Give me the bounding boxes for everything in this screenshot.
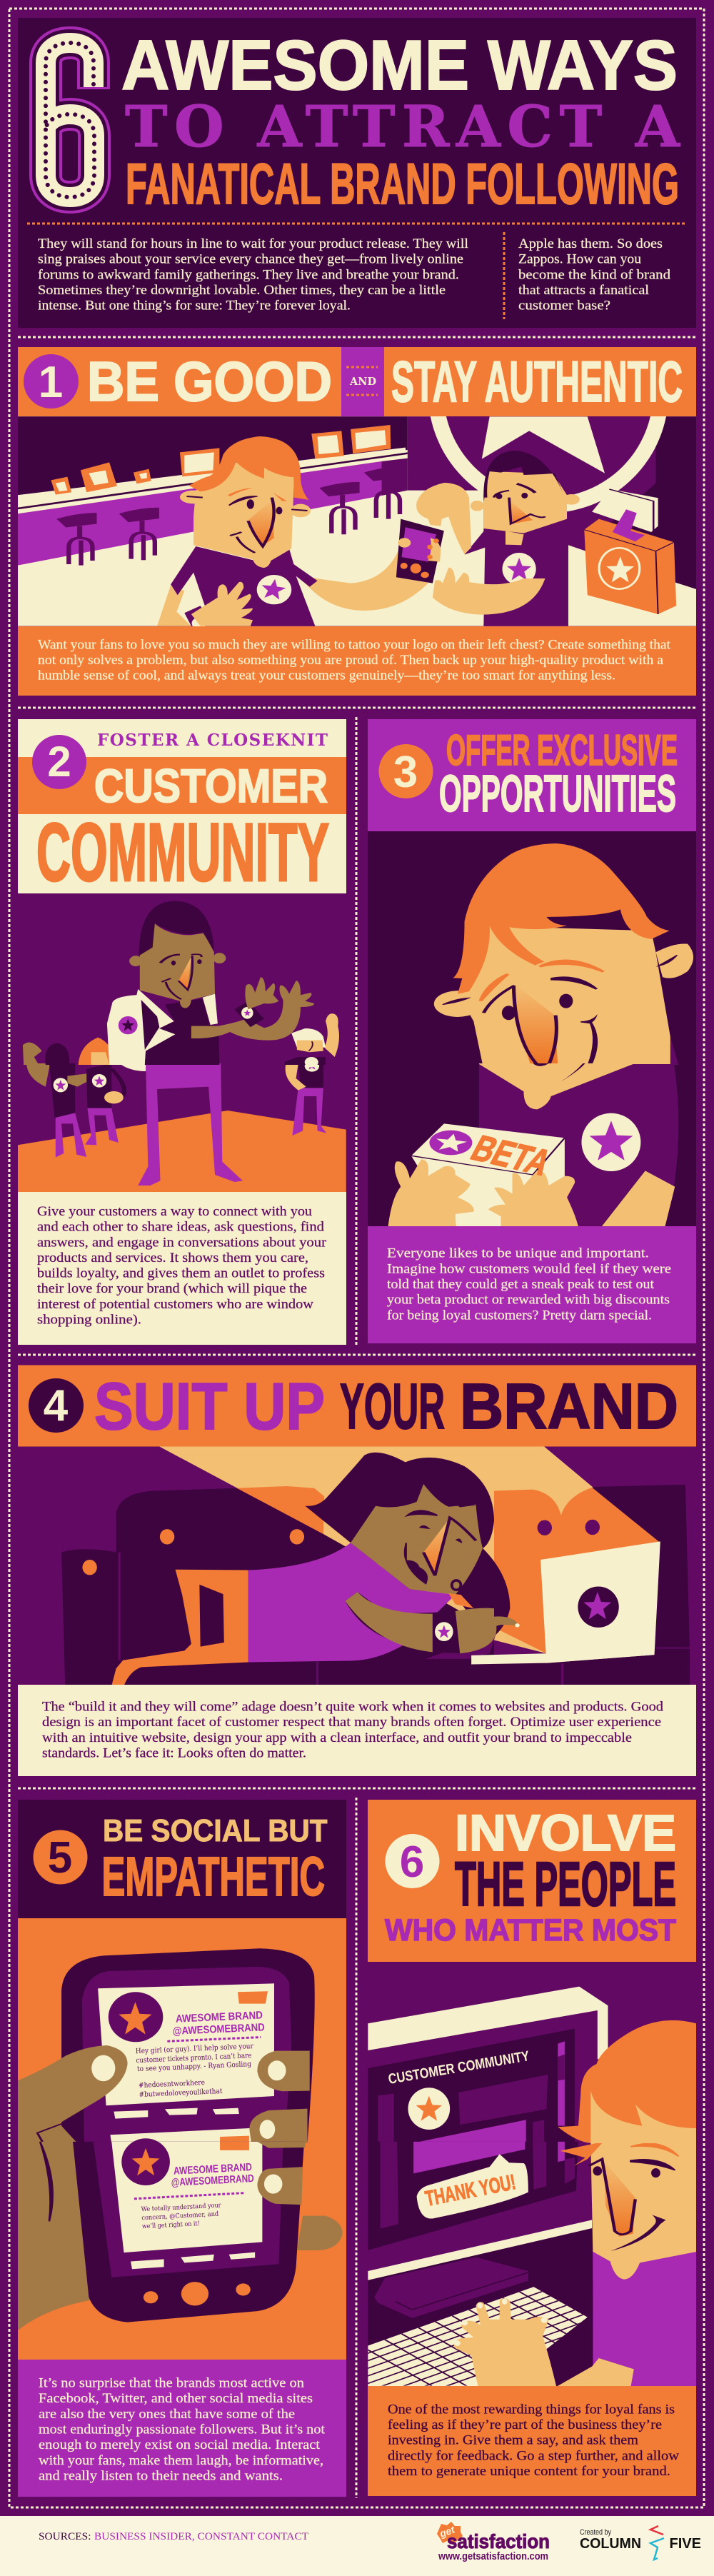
heading: section 1: AND [349, 375, 376, 388]
caption: section 3 [368, 1226, 696, 1343]
panel: header [18, 18, 696, 328]
intro text [38, 236, 468, 314]
caption: section 5: most enduringly passionate followers. But it’s not [39, 2422, 326, 2437]
sources: BUSINESS INSIDER, CONSTANT CONTACT [94, 2531, 308, 2542]
caption: section 3: Imagine how customers would feel if they were [387, 1261, 671, 1276]
heading: section 1: 1 [39, 358, 63, 407]
caption: section 6: directly for feedback. Go a step further, and allow [388, 2448, 679, 2463]
caption: section 2: interest of potential customers who are window [37, 1297, 313, 1312]
heading: section 6 [368, 1800, 696, 1962]
tweet 1 text: AWESOME BRAND [176, 2009, 263, 2025]
tweet 1 text [134, 2009, 268, 2099]
logo: get satisfaction: get [438, 2523, 457, 2540]
caption: section 2: answers, and engage in conversations about your [37, 1235, 327, 1250]
heading: section 6: WHO MATTER MOST [385, 1913, 676, 1948]
caption: section 3: told that they could get a sneak peak to test out [387, 1277, 655, 1292]
intro side text: Apple has them. So does [518, 236, 663, 251]
caption: section 5: enough to merely exist on social media. Interact [39, 2437, 321, 2452]
sub: customer with raised hand [416, 451, 580, 626]
caption: section 3: for being loyal customers? Pretty darn special. [387, 1308, 652, 1323]
intro side text: become the kind of brand [518, 267, 671, 282]
panel: section 5 [18, 1800, 346, 2497]
tweet 1 text: to see you unhappy. - Ryan Gosling [137, 2060, 252, 2073]
tweet 1 text: #butwedoloveyoulikethat [139, 2088, 223, 2099]
caption: section 2: and each other to share ideas, ask questions, find [37, 1220, 325, 1235]
intro text: Sometimes they’re downright lovable. Other times, they can be a little [38, 283, 446, 298]
caption: section 1: Want your fans to love you so much they are willing to tattoo your logo on their left chest? Create something that [38, 637, 671, 652]
intro side text: customer base? [518, 299, 610, 314]
tweet 2 text: we’ll get right on it! [142, 2220, 200, 2230]
caption: section 4: The “build it and they will come” adage doesn’t quite work when it comes to websites and products. Good [42, 1700, 664, 1715]
illustration: fans at the store [18, 416, 696, 626]
caption: section 5: and really listen to their needs and wants. [39, 2468, 283, 2484]
tweet 1 text: #hedoesntworkhere [139, 2079, 205, 2090]
caption: section 3: Everyone likes to be unique and important. [387, 1246, 649, 1261]
caption: section 5: are also the very ones that have some of the [39, 2407, 295, 2422]
icon: big numeral six [46, 43, 94, 197]
heading: section 5: EMPATHETIC [101, 1846, 325, 1908]
sub: fan with phone [157, 436, 444, 629]
illustration: fan at computer [368, 1987, 696, 2386]
logo: get satisfaction [437, 2522, 550, 2562]
sub: cereal box [584, 509, 676, 614]
title: line 2: TO ATTRACT A [125, 93, 680, 160]
heading: section 2 [18, 731, 346, 898]
caption: section 6 [368, 2386, 696, 2496]
logo: column five [580, 2526, 701, 2560]
label: beta text: BETA [464, 1128, 558, 1183]
intro text: intense. But one thing’s for sure: They’re forever loyal. [38, 299, 351, 314]
logo: get satisfaction: satisfaction [447, 2530, 550, 2552]
panel: section 6 [368, 1800, 696, 2496]
tweet 2 text: AWESOME BRAND [174, 2161, 252, 2177]
heading: section 2: 2 [47, 738, 71, 786]
logo: column five: Created by [580, 2528, 611, 2537]
caption: section 3: your beta product or rewarded with big discounts [387, 1293, 670, 1308]
panel: section 3 [368, 719, 696, 1343]
caption: section 5: Facebook, Twitter, and other social media sites [39, 2391, 313, 2406]
heading: section 2: CUSTOMER [94, 759, 328, 812]
intro side text: Zappos. How can you [518, 252, 642, 267]
heading: section 5 [18, 1800, 346, 1918]
heading: section 3: 3 [393, 748, 418, 797]
footer [39, 2522, 701, 2562]
caption: section 6: them to generate unique content for your brand. [388, 2464, 670, 2479]
illustration: fan with beta box [368, 831, 696, 1227]
label: customer community: CUSTOMER COMMUNITY [387, 2048, 531, 2088]
heading: section 2: COMMUNITY [36, 807, 329, 898]
caption: section 6: One of the most rewarding things for loyal fans is [388, 2402, 675, 2417]
caption: section 4: with an intuitive website, design your app with a clean interface, and outfit your brand to impeccable [42, 1730, 632, 1745]
logo: column five: COLUMN [580, 2536, 641, 2552]
tweet 2 text: concern, @Customer, and [141, 2211, 219, 2222]
tweet 2 text [133, 2161, 256, 2231]
caption: section 4: design is an important facet of customer respect that many brands often forget. Optimize user experience [42, 1715, 661, 1730]
heading: section 5: 5 [48, 1833, 72, 1883]
caption: section 5 [18, 2360, 346, 2497]
caption: section 1: not only solves a problem, but also something you are proud of. Then back up your high-quality product with a [38, 653, 664, 668]
heading: section 4: 4 [44, 1381, 69, 1430]
intro text: sing praises about your service every chance they get—from lively online [38, 252, 463, 267]
intro side text [518, 236, 671, 314]
heading: section 1: BE GOOD [87, 350, 332, 413]
tweet 2 text: We totally understand your [141, 2202, 221, 2213]
caption: section 2: builds loyalty, and gives them an outlet to profess [37, 1266, 325, 1281]
caption: section 4 [18, 1685, 696, 1776]
illustration: community manager and fans [18, 893, 346, 1192]
caption: section 2: their love for your brand (which will pique the [37, 1281, 307, 1296]
caption: section 2: shopping online). [37, 1313, 141, 1327]
intro text: They will stand for hours in line to wait for your product release. They will [38, 236, 468, 251]
panel: section 1 [18, 347, 696, 696]
heading: section 1 [18, 347, 696, 416]
panel: section 4 [18, 1365, 696, 1776]
heading: section 6: 6 [400, 1838, 424, 1887]
caption: section 6: investing in. Give them a say, and ask them [388, 2433, 638, 2448]
heading: section 4: YOUR [340, 1371, 445, 1443]
label: thank you: THANK YOU! [423, 2170, 518, 2211]
caption: section 1 [18, 626, 696, 696]
sources: SOURCES: [39, 2531, 91, 2542]
panel: section 2 [18, 719, 346, 1345]
tweet 1 text: customer tickets pronto. I can’t bare [136, 2052, 252, 2065]
heading: section 4 [18, 1365, 696, 1447]
logo: column five: FIVE [670, 2536, 701, 2552]
tweet 1 text: @AWESOMEBRAND [172, 2021, 265, 2038]
intro text: forums to awkward family gatherings. They live and breathe your brand. [38, 267, 459, 282]
heading: section 4: BRAND [460, 1371, 678, 1443]
caption: section 2: Give your customers a way to connect with you [37, 1204, 313, 1219]
logo: get satisfaction: www.getsatisfaction.com [438, 2550, 548, 2562]
title: line 1: AWESOME WAYS [121, 26, 678, 104]
caption: section 5: It’s no surprise that the brands most active on [39, 2376, 305, 2391]
tweet 1 text: Hey girl (or guy). I’ll help solve your [136, 2043, 253, 2055]
caption: section 5: with your fans, make them laugh, be informative, [39, 2453, 323, 2468]
caption: section 2: products and services. It shows them you care, [37, 1251, 308, 1266]
intro side text: that attracts a fanatical [518, 283, 649, 298]
caption: section 6: feeling as if they’re part of the business they’re [388, 2417, 662, 2432]
heading: section 6: INVOLVE [455, 1805, 676, 1862]
tweet 2 text: @AWESOMEBRAND [171, 2172, 254, 2189]
illustration: designer on couch with laptop [18, 1447, 696, 1685]
heading: section 4: SUIT UP [94, 1369, 325, 1443]
heading: section 5: BE SOCIAL BUT [103, 1813, 328, 1848]
caption: section 2 [18, 1192, 346, 1345]
illustration: phone with tweets [18, 1918, 346, 2360]
caption: section 1: humble sense of cool, and always treat your customers genuinely—they’re too smart for anything less. [38, 668, 615, 683]
heading: section 2: FOSTER A CLOSEKNIT [97, 731, 328, 750]
caption: section 4: standards. Let’s face it: Looks often do matter. [42, 1745, 306, 1760]
heading: section 3 [368, 719, 696, 831]
